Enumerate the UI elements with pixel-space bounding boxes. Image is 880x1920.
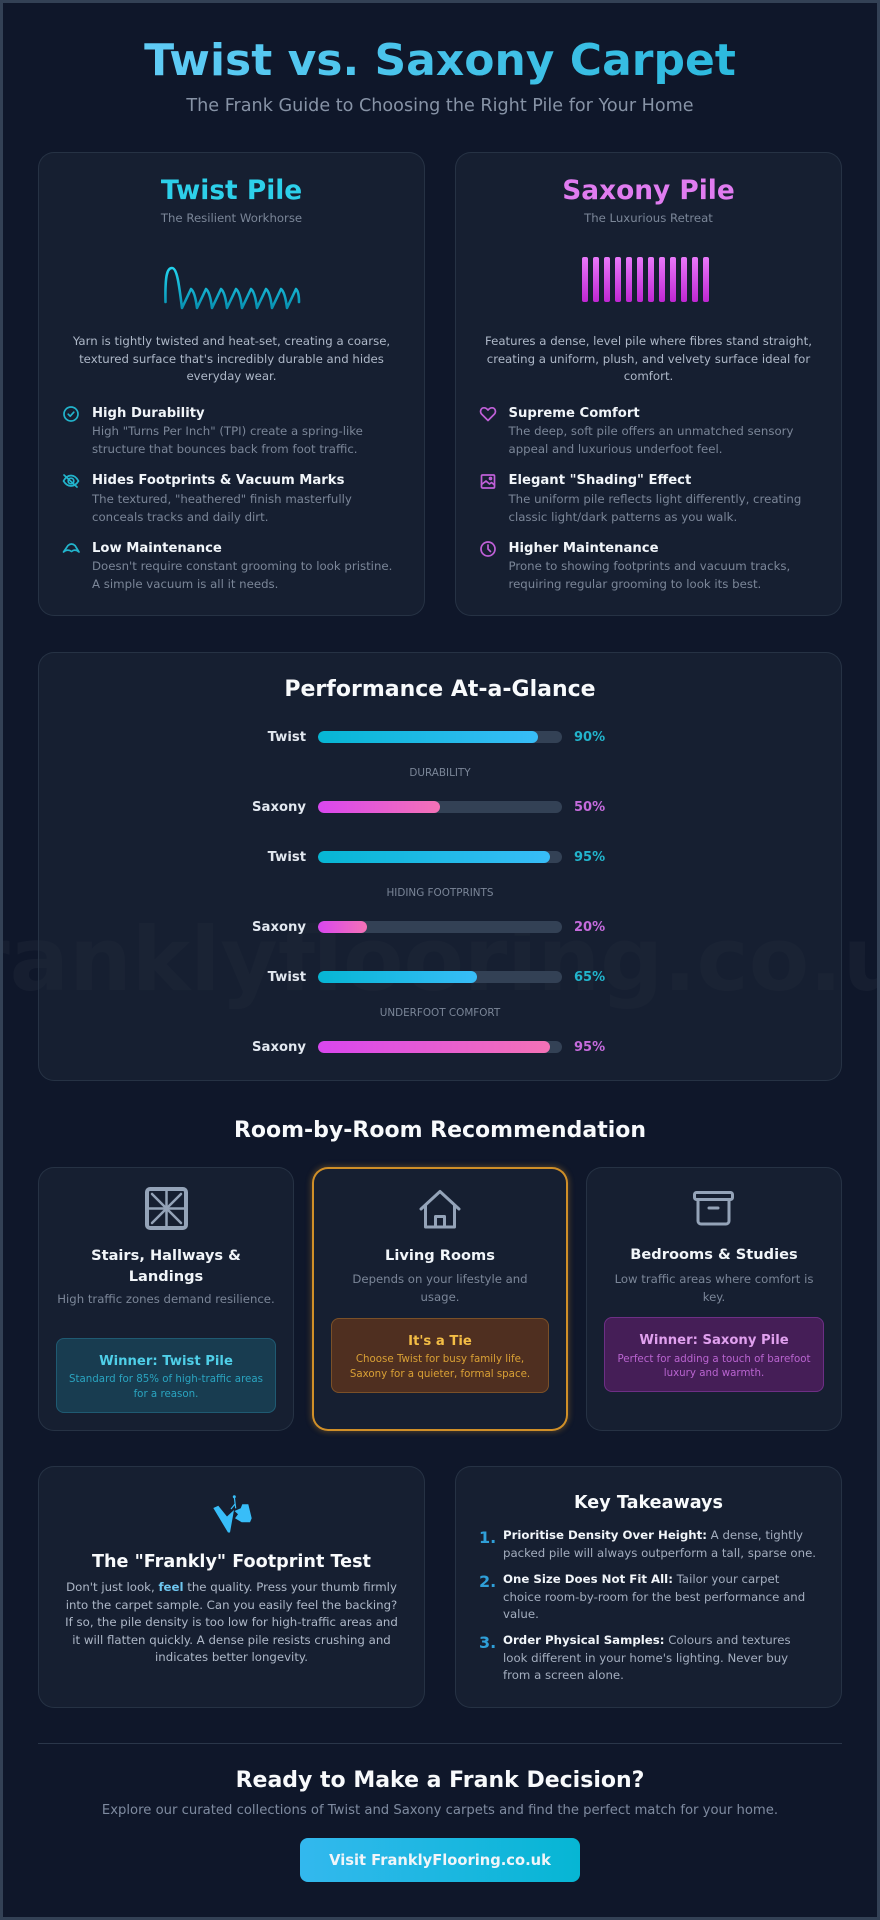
feature: low maintenance [62,541,392,591]
icon: house [419,1190,461,1228]
callout: winner saxony [604,1317,824,1392]
description: creating a uniform, plush, and velvety surface ideal for [487,352,810,366]
feature: shading effect: The uniform pile reflects light differently, creating [508,492,801,506]
takeaway 3: 3. [479,1633,496,1652]
description: comfort. [624,369,673,383]
feature: low maintenance: Doesn't require constant grooming to look pristine. [92,559,392,573]
feature: hides footprints: Hides Footprints & Vacuum Marks [92,473,344,488]
text: footprint test: it will flatten quickly. A dense pile resists crushing and [72,1633,391,1647]
title: Twist vs. Saxony Carpet [144,35,736,86]
feature: supreme comfort: appeal and luxurious underfoot feel. [508,442,722,456]
button [300,1838,580,1882]
panel: saxony pile [455,152,842,616]
panel: performance at-a-glance [38,652,842,1081]
description [485,334,812,383]
takeaway 2: value. [503,1607,539,1621]
heading: stairs: Stairs, Hallways & [91,1247,241,1264]
feature: high durability: High "Turns Per Inch" (TPI) create a spring-like [92,424,363,438]
call to action [102,1768,778,1882]
icon: wave chevron [62,543,80,553]
feature: hides footprints [62,473,352,524]
bar chart: hiding footprints: 95% [574,850,605,865]
text: living [352,1272,528,1304]
takeaway 1: packed pile will always outperform a tall, sparse one. [503,1546,816,1560]
description: Features a dense, level pile where fibres stand straight, [485,334,812,348]
bar chart: underfoot comfort: UNDERFOOT COMFORT [380,1007,500,1019]
takeaway 2 [479,1572,805,1621]
icon: twist pile fibres [164,266,300,310]
bar chart: durability: 50% [574,800,605,815]
takeaway 2: One Size Does Not Fit All: Tailor your carpet [503,1572,779,1586]
text: bedrooms [615,1272,813,1304]
bar chart: underfoot comfort: 65% [574,970,605,985]
bar chart: durability: Saxony [252,800,306,815]
feature: shading effect: classic light/dark patterns as you walk. [508,510,737,524]
takeaway 2: 2. [479,1572,496,1591]
text: bedrooms: Low traffic areas where comfort is [615,1272,813,1286]
bar chart: hiding footprints: HIDING FOOTPRINTS [386,887,494,899]
callout: winner saxony: Perfect for adding a touch of barefoot [617,1352,811,1364]
heading: twist pile: Twist Pile [161,175,302,206]
text: footprint test: indicates better longevity. [155,1650,308,1664]
takeaway 3: from a screen alone. [503,1668,624,1682]
bar chart: hiding footprints: 20% [574,920,605,935]
text: footprint test: into the carpet sample. Can you easily feel the backing? [66,1598,397,1612]
bar chart: hiding footprints [252,850,605,935]
bar chart: hiding footprints: Saxony [252,920,306,935]
bar chart: durability [252,730,605,815]
callout: winner twist [56,1338,276,1413]
icon: saxony pile fibres [582,257,709,302]
text: living: Depends on your lifestyle and [352,1272,528,1286]
callout: tie: Saxony for a quieter, formal space. [350,1368,530,1380]
icon: stairs grid [145,1187,188,1230]
feature: higher maintenance [480,541,790,591]
callout: winner twist: Standard for 85% of high-traffic areas [69,1373,263,1385]
feature: high durability: High Durability [92,406,205,421]
description: everyday wear. [186,369,277,383]
bar chart: durability: Twist [268,730,306,745]
feature: high durability: structure that bounces back from foot traffic. [92,442,358,456]
text: stairs: High traffic zones demand resilience. [57,1292,275,1306]
panel: footprint test [38,1466,425,1708]
heading: key takeaways: Key Takeaways [574,1493,723,1513]
description: textured surface that's incredibly durable and hides [79,352,384,366]
takeaway 3: look different in your home's lighting. Never buy [503,1651,788,1665]
description: Yarn is tightly twisted and heat-set, creating a coarse, [73,334,390,348]
feature: hides footprints: conceals tracks and daily dirt. [92,510,268,524]
feature: shading effect: Elegant "Shading" Effect [508,473,691,488]
callout: winner twist: Winner: Twist Pile [99,1354,233,1369]
feature: high durability [63,406,363,456]
callout: tie: Choose Twist for busy family life, [356,1353,524,1365]
panel: key takeaways [455,1466,842,1708]
bar chart: durability: 90% [574,730,605,745]
text: bedrooms: key. [703,1290,725,1304]
takeaway 3 [479,1633,791,1682]
feature: higher maintenance: Higher Maintenance [508,541,659,556]
bar chart: underfoot comfort: Saxony [252,1040,306,1055]
takeaway 1: Prioritise Density Over Height: A dense, tightly [503,1528,803,1542]
feature: low maintenance: A simple vacuum is all it needs. [92,577,278,591]
heading: footprint test: The "Frankly" Footprint Test [92,1552,371,1572]
feature: higher maintenance: Prone to showing footprints and vacuum tracks, [508,559,790,573]
heading: cta: Ready to Make a Frank Decision? [236,1768,644,1793]
takeaway 1: 1. [479,1528,496,1547]
text: footprint test: Don't just look, feel the quality. Press your thumb firmly [66,1580,397,1594]
icon: thumb press [213,1495,252,1532]
header [144,35,736,116]
takeaway 2: choice room-by-room for the best performance and [503,1590,805,1604]
callout: winner twist: for a reason. [134,1388,198,1400]
text: living: usage. [420,1290,459,1304]
heading: saxony pile: Saxony Pile [562,175,735,206]
bar chart: durability: DURABILITY [409,767,471,779]
bar chart: underfoot comfort: Twist [268,970,306,985]
description [72,334,390,383]
heading: stairs [91,1247,241,1285]
tagline: The Luxurious Retreat [584,211,713,225]
icon: heart [480,407,496,422]
callout: tie [331,1318,549,1393]
icon: eye off [62,474,80,488]
feature: supreme comfort: The deep, soft pile offers an unmatched sensory [508,424,793,438]
tagline: The Resilient Workhorse [161,211,302,225]
panel: stairs, hallways [38,1167,294,1431]
heading: living: Living Rooms [385,1247,495,1264]
text: footprint test [65,1580,398,1664]
feature: higher maintenance: requiring regular grooming to look its best. [508,577,761,591]
icon: clock [480,541,496,557]
bar chart: underfoot comfort [252,970,605,1055]
text: footprint test: If so, the pile density is too low for high-traffic areas and [65,1615,398,1629]
icon: archive box [693,1191,734,1226]
title [0,31,880,91]
takeaway 3: Order Physical Samples: Colours and textures [503,1633,791,1647]
bar chart: underfoot comfort: 95% [574,1040,605,1055]
heading: performance: Performance At-a-Glance [284,677,596,702]
feature: hides footprints: The textured, "heathered" finish masterfully [92,492,352,506]
panel: bedrooms [586,1167,842,1431]
subtitle: The Frank Guide to Choosing the Right Pile for Your Home [186,96,694,116]
icon: check circle [63,406,79,422]
heading: room-by-room: Room-by-Room Recommendation [234,1118,646,1143]
panel: twist pile [38,152,425,616]
bar chart: hiding footprints: Twist [268,850,306,865]
callout: winner saxony: luxury and warmth. [664,1367,764,1379]
panel: living rooms [312,1167,568,1431]
feature: shading effect [480,473,801,524]
feature: supreme comfort [480,406,793,456]
callout: winner saxony: Winner: Saxony Pile [639,1333,789,1348]
takeaway 1 [479,1528,816,1560]
feature: low maintenance: Low Maintenance [92,541,222,556]
feature: supreme comfort: Supreme Comfort [508,406,640,421]
callout: tie: It's a Tie [408,1334,472,1349]
heading: stairs: Landings [129,1268,203,1285]
text: cta: Explore our curated collections of Twist and Saxony carpets and find the perfect match for your home. [102,1803,778,1818]
button: Visit FranklyFlooring.co.uk [329,1852,551,1869]
heading: bedrooms: Bedrooms & Studies [630,1246,798,1263]
icon: picture [480,474,496,489]
